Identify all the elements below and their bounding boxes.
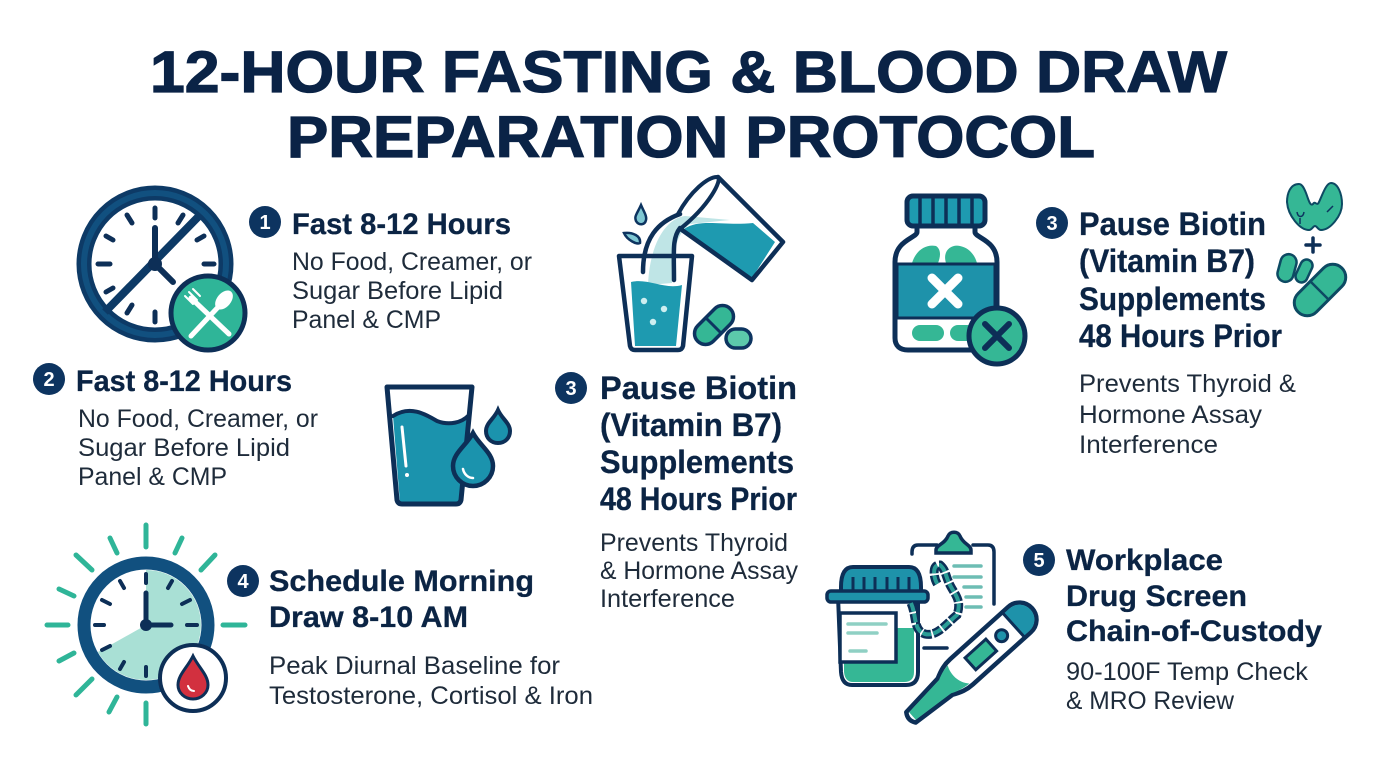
step 1: fast 8-12 hours: No Food, Creamer, or [292, 248, 532, 276]
step 4: schedule morning draw: Draw 8-10 AM [269, 601, 468, 634]
step 4: schedule morning draw: Testosterone, Cortisol & Iron [269, 682, 593, 710]
step 3: pause biotin (center): Pause Biotin [600, 370, 797, 406]
icon: bottle with x badge [895, 196, 1025, 364]
step 5: workplace drug screen: Chain-of-Custody [1066, 615, 1322, 648]
step 3: pause biotin (right): Pause Biotin [1079, 206, 1266, 242]
step 4: schedule morning draw [227, 565, 593, 710]
step 1: fast 8-12 hours: Panel & CMP [292, 306, 441, 334]
step 1: fast 8-12 hours: Sugar Before Lipid [292, 277, 503, 305]
title [150, 40, 1227, 170]
step 1: fast 8-12 hours: Fast 8-12 Hours [292, 208, 511, 241]
step 3: pause biotin (center) [555, 370, 798, 613]
icon: thyroid, plus and capsules [1276, 183, 1351, 321]
step 2: fast 8-12 hours [33, 363, 318, 491]
step 5: workplace drug screen [1023, 544, 1322, 715]
step 5: workplace drug screen: & MRO Review [1066, 687, 1235, 715]
step 5: workplace drug screen: 5 [1033, 550, 1045, 572]
title: 12-HOUR FASTING & BLOOD DRAW [150, 40, 1227, 105]
step 2: fast 8-12 hours: 2 [43, 369, 55, 391]
step 3: pause biotin (right): Prevents Thyroid & [1079, 370, 1296, 398]
step 3: pause biotin (center): 48 Hours Prior [600, 481, 797, 517]
step 2: fast 8-12 hours: No Food, Creamer, or [78, 405, 318, 433]
step 5: workplace drug screen: 90-100F Temp Check [1066, 658, 1308, 686]
step 4: schedule morning draw: Schedule Morning [269, 565, 534, 598]
step 3: pause biotin (center): Supplements [600, 444, 794, 480]
step 3: pause biotin (center): Prevents Thyroid [600, 529, 788, 557]
step 2: fast 8-12 hours: Sugar Before Lipid [78, 434, 290, 462]
icon: specimen cup, chain, clipboard and thermometer [827, 532, 1043, 732]
icon: sunrise clock with blood drop [47, 525, 245, 724]
step 1: fast 8-12 hours [249, 206, 532, 334]
step 4: schedule morning draw: 4 [237, 571, 249, 593]
icon: water poured into glass with pills [619, 177, 783, 350]
step 5: workplace drug screen: Workplace [1066, 544, 1223, 577]
step 3: pause biotin (right): Supplements [1079, 281, 1266, 317]
step 3: pause biotin (center): Interference [600, 585, 735, 613]
step 3: pause biotin (right): 3 [1046, 213, 1058, 235]
step 3: pause biotin (center): & Hormone Assay [600, 557, 798, 585]
icon: clock with slash and cutlery [84, 193, 245, 350]
step 2: fast 8-12 hours: Fast 8-12 Hours [76, 365, 292, 398]
step 4: schedule morning draw: Peak Diurnal Baseline for [269, 652, 560, 680]
step 3: pause biotin (right): (Vitamin B7) [1079, 243, 1255, 279]
step 1: fast 8-12 hours: 1 [259, 212, 271, 234]
icon: water glass with drops [387, 387, 510, 504]
step 3: pause biotin (right): Interference [1079, 431, 1218, 459]
step 3: pause biotin (right) [1036, 206, 1296, 459]
step 2: fast 8-12 hours: Panel & CMP [78, 463, 227, 491]
step 3: pause biotin (center): (Vitamin B7) [600, 407, 782, 443]
step 3: pause biotin (right): Hormone Assay [1079, 401, 1263, 429]
step 3: pause biotin (center): 3 [565, 378, 577, 400]
step 5: workplace drug screen: Drug Screen [1066, 580, 1247, 613]
title: PREPARATION PROTOCOL [287, 105, 1095, 170]
step 3: pause biotin (right): 48 Hours Prior [1079, 318, 1282, 354]
